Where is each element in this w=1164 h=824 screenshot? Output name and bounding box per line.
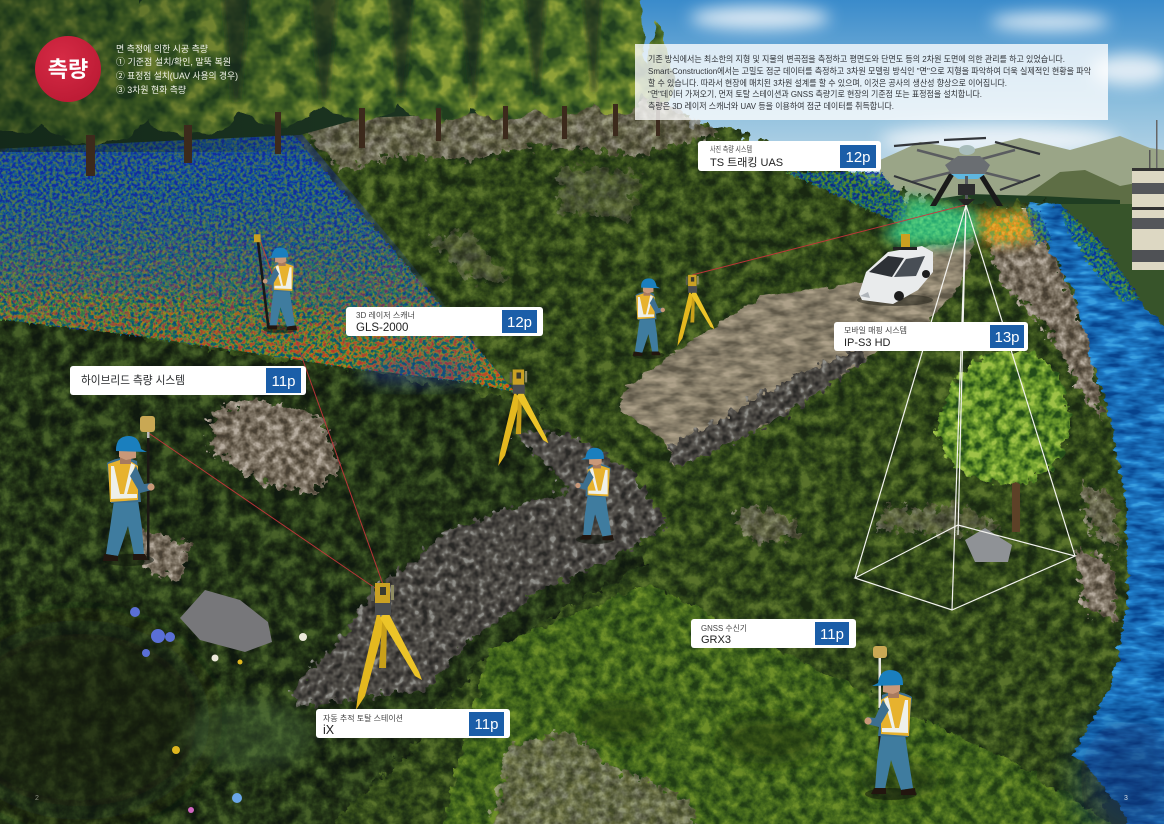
- badge: survey heading: [35, 36, 101, 102]
- label: TS tracking UAS: [698, 141, 881, 171]
- panel: intro description: 할 수 있습니다. 따라서 현장에 매치된 3차원 설계를 할 수 있으며, 이것은 공사의 생산성 향상으로 이어집니다.: [648, 77, 1007, 88]
- text: survey steps: ② 표정점 설치(UAV 사용의 경우): [116, 70, 238, 81]
- clouds: [690, 6, 1164, 156]
- rocky strip below trees: [285, 100, 720, 170]
- panel: intro description: "면"데이터 가져오기, 먼저 토탈 스테이션과 GNSS 측량기로 현장의 기준점 또는 표정점을 설치합니다.: [648, 88, 982, 99]
- cobble road section: [668, 352, 870, 468]
- label: IP-S3 HD: [834, 322, 1028, 351]
- label: GLS-2000: [346, 307, 543, 336]
- scan point cloud near drone: [785, 172, 1052, 246]
- drone: [894, 138, 1040, 206]
- building: [1132, 120, 1164, 270]
- scan point cloud left slope: [0, 120, 515, 392]
- label: auto tracking total station iX: 11p: [475, 716, 498, 733]
- worker: cobble path: [575, 448, 614, 544]
- text: survey steps: [116, 43, 238, 95]
- river: [1030, 205, 1164, 824]
- river bottom shade: [1080, 720, 1164, 824]
- tree line forest: [0, 0, 674, 152]
- sky: [560, 0, 1164, 215]
- dark lower-left hillside: [0, 300, 650, 824]
- worker: hybrid GNSS rover: [102, 416, 155, 566]
- tree trunks: [86, 98, 660, 176]
- dark patches on bright slope: [580, 700, 940, 798]
- label: GLS-2000: 12p: [507, 314, 532, 331]
- label: GNSS receiver GRX3: 11p: [820, 626, 844, 643]
- page number left: 2: [35, 795, 39, 802]
- rock near tree: [965, 528, 1012, 562]
- red laser lines: [147, 205, 965, 590]
- label: IP-S3 HD: IP-S3 HD: [844, 337, 891, 349]
- boulder left: [180, 590, 272, 652]
- tripod: auto tracking total station iX: [356, 583, 422, 710]
- text: survey steps: 면 측정에 의한 시공 측량: [116, 43, 208, 54]
- label: GLS-2000: 3D 레이저 스캐너: [356, 310, 415, 320]
- tripod: 3D laser scanner: [498, 369, 548, 466]
- text: survey steps: ① 기준점 설치/확인, 말뚝 복원: [116, 56, 231, 67]
- page number right: 3: [1124, 795, 1128, 802]
- label: auto tracking total station iX: [316, 709, 510, 738]
- label: hybrid survey system: [70, 366, 306, 395]
- text: survey steps: ③ 3차원 현화 측량: [116, 84, 186, 95]
- bright front slope: [440, 583, 1130, 824]
- mountains: [880, 136, 1164, 208]
- worker: scan slope: [254, 234, 298, 333]
- worker: GNSS receiver: [864, 646, 917, 800]
- rainbow point cloud on river bank: [1062, 208, 1140, 300]
- label: hybrid survey system: 하이브리드 측량 시스템: [81, 373, 185, 387]
- broad-leaf tree: [938, 351, 1070, 532]
- car with mobile mapping system: [857, 234, 933, 306]
- dark shade lower left: [0, 620, 210, 820]
- rock patches: [135, 165, 1118, 824]
- right central slope: [640, 350, 1120, 800]
- panel: intro description: [635, 44, 1108, 120]
- cobble path: [292, 432, 668, 706]
- worker: road side: [632, 278, 665, 359]
- label: TS tracking UAS: 12p: [845, 149, 871, 166]
- panel: intro description: 기존 방식에서는 최소한의 지형 및 지물의 변곡점을 측정하고 평면도와 단면도 등의 2차원 도면에 의한 관리를 하고 있었습니다.: [648, 53, 1065, 64]
- label: auto tracking total station iX: iX: [323, 723, 335, 737]
- badge: survey heading: 측량: [48, 57, 88, 82]
- light shrub lower-left: [185, 700, 315, 770]
- label: hybrid survey system: 11p: [272, 373, 295, 390]
- label: IP-S3 HD: 13p: [994, 329, 1020, 346]
- drone scan pyramid lines: [855, 205, 1075, 610]
- dirt road: [620, 238, 975, 467]
- label: GLS-2000: GLS-2000: [356, 322, 408, 334]
- tripod: road total station: [677, 275, 714, 346]
- label: GNSS receiver GRX3: GNSS 수신기: [701, 624, 747, 633]
- panel: intro description: Smart-Construction에서는 고밀도 점군 데이터를 측정하고 3차원 모델링 방식인 "면"으로 지형을 파악하여 더욱 실제적인 현황을 파악: [648, 65, 1091, 76]
- label: TS tracking UAS: TS 트래킹 UAS: [710, 156, 783, 169]
- label: GNSS receiver GRX3: GRX3: [701, 634, 731, 646]
- flowers left: [130, 607, 307, 813]
- label: GNSS receiver GRX3: [691, 619, 856, 648]
- label: TS tracking UAS: 사진 측량 시스템: [710, 144, 752, 154]
- panel: intro description: 측량은 3D 레이저 스캐너와 UAV 등을 이용하여 점군 데이터를 취득합니다.: [648, 100, 894, 111]
- label: auto tracking total station iX: 자동 추적 토탈 스테이션: [323, 713, 403, 723]
- right field: [1040, 204, 1164, 334]
- label: IP-S3 HD: 모바일 매핑 시스템: [844, 325, 907, 335]
